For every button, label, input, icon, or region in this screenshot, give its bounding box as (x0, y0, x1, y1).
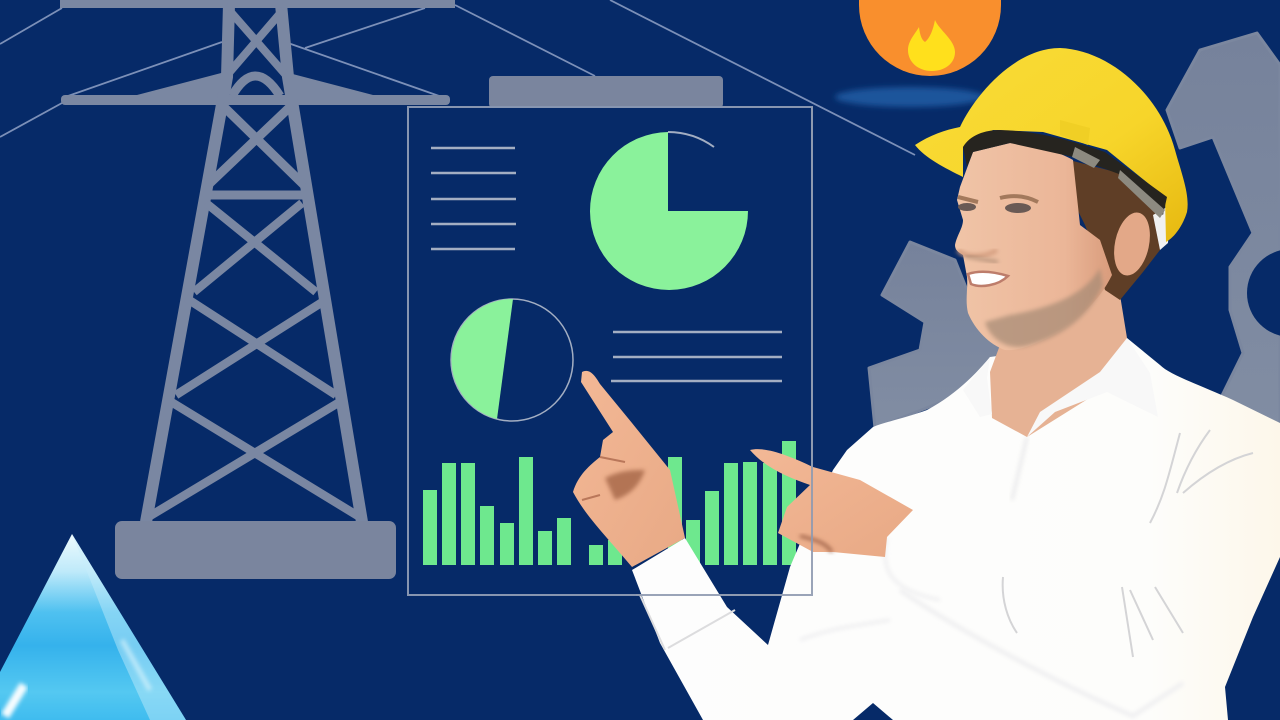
text lines top (431, 148, 516, 249)
engineer figure (573, 48, 1280, 720)
text lines middle (611, 332, 782, 381)
hair (1050, 155, 1160, 300)
face (955, 143, 1112, 350)
panel: report clipboard (408, 76, 812, 595)
icon: flame badge (835, 0, 1001, 107)
panel frame overlay (636, 107, 812, 595)
shirt shading (640, 430, 1253, 716)
mouth (968, 272, 1008, 286)
collar (963, 338, 1158, 437)
neck (990, 265, 1127, 437)
pie chart large (590, 132, 748, 290)
pointing hand right (750, 449, 913, 557)
pie chart small (451, 299, 573, 421)
icon: gear (869, 33, 1280, 430)
eyes, brows and nose (958, 196, 1038, 262)
icon: power transmission tower (0, 0, 915, 579)
icon: water drop (0, 534, 186, 720)
bar chart (423, 441, 796, 565)
shirt body (632, 338, 1280, 720)
hat liner (1153, 205, 1170, 250)
ear (1109, 209, 1155, 279)
pointing hand left (573, 371, 685, 567)
stubble (985, 268, 1103, 347)
hard hat (915, 48, 1188, 242)
